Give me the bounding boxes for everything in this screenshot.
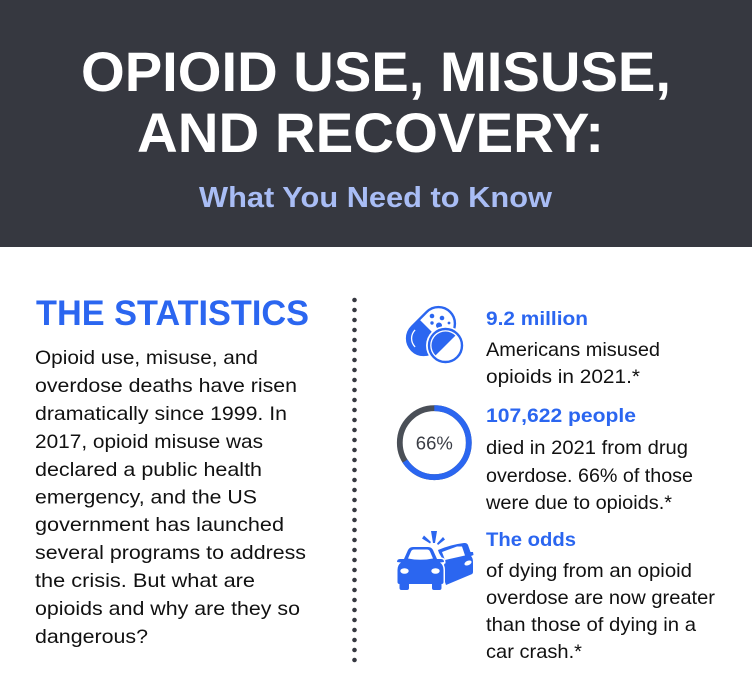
intro paragraph: government has launched	[35, 514, 284, 536]
stat: 9.2 million	[400, 300, 660, 388]
intro paragraph	[35, 347, 306, 648]
icon: pills	[400, 300, 465, 365]
stat text: overdose are now greater	[486, 587, 716, 609]
stat text: than those of dying in a	[486, 614, 696, 636]
heading: THE STATISTICS	[36, 294, 309, 333]
intro paragraph: emergency, and the US	[35, 486, 257, 508]
stat text: car crash.*	[486, 641, 582, 663]
subtitle: What You Need to Know	[199, 182, 552, 214]
intro paragraph: Opioid use, misuse, and	[35, 347, 258, 369]
intro paragraph: dramatically since 1999. In	[35, 403, 287, 425]
header banner	[0, 0, 752, 247]
intro paragraph: 2017, opioid misuse was	[35, 431, 263, 453]
intro paragraph: declared a public health	[35, 459, 262, 481]
title: OPIOID USE, MISUSE,	[81, 40, 671, 103]
icon: car crash	[397, 531, 474, 590]
intro paragraph: several programs to address	[35, 542, 306, 564]
stat text	[486, 308, 660, 388]
donut chart: 66%: 66%	[416, 432, 453, 454]
stat text	[486, 529, 716, 663]
intro paragraph: the crisis. But what are	[35, 570, 255, 592]
stat text: overdose. 66% of those	[486, 465, 693, 487]
stat text: 9.2 million	[486, 308, 588, 330]
stat: the odds	[397, 529, 716, 663]
stat text: opioids in 2021.*	[486, 366, 640, 388]
stat text	[485, 405, 693, 514]
intro paragraph: overdose deaths have risen	[35, 375, 297, 397]
stat text: of dying from an opioid	[486, 560, 692, 582]
intro paragraph: dangerous?	[35, 626, 148, 648]
title	[81, 40, 671, 164]
stat text: were due to opioids.*	[485, 492, 672, 514]
stat text: died in 2021 from drug	[486, 437, 688, 459]
donut chart: 66%	[400, 408, 469, 477]
stat text: The odds	[486, 529, 576, 551]
stat text: 107,622 people	[486, 405, 636, 427]
intro paragraph: opioids and why are they so	[35, 598, 300, 620]
stat: 107,622 people	[400, 405, 693, 514]
title: AND RECOVERY:	[137, 101, 604, 164]
stat text: Americans misused	[486, 339, 660, 361]
panel: the statistics intro	[35, 294, 309, 648]
